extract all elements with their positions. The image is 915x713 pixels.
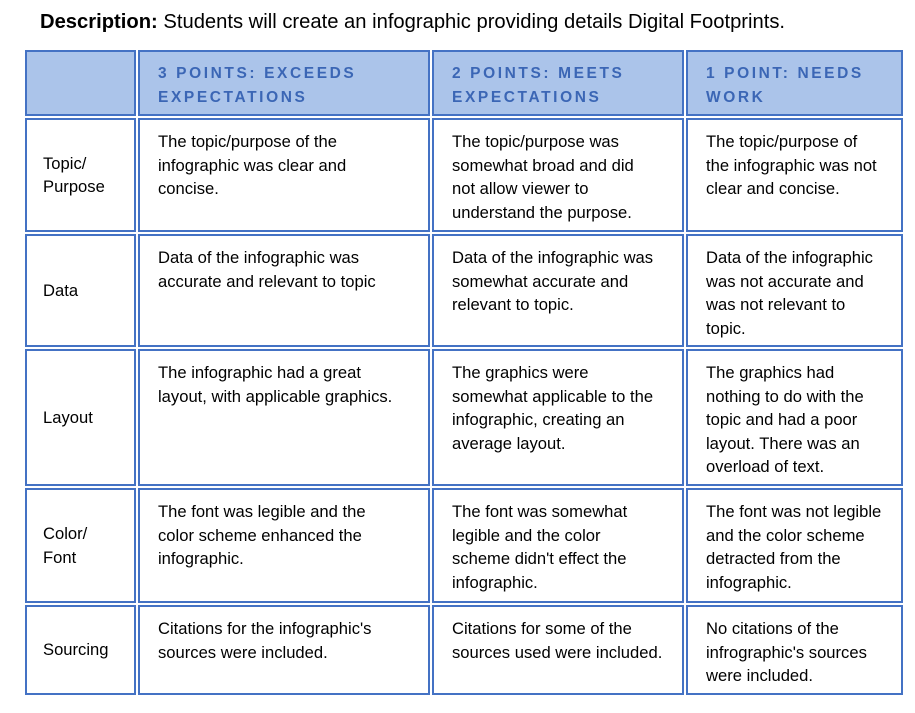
rubric table: topic and had a poor: [706, 410, 857, 429]
rubric table: The topic/purpose of the: [158, 132, 337, 151]
rubric table: concise.: [158, 179, 219, 198]
rubric table: detracted from the: [706, 549, 841, 568]
rubric table: EXPECTATIONS: [452, 88, 601, 106]
rubric table: relevant to topic.: [452, 295, 574, 314]
rubric table: The font was legible and the: [158, 502, 366, 521]
rubric table: The graphics were: [452, 363, 589, 382]
rubric table: color scheme enhanced the: [158, 526, 362, 544]
rubric table: Topic/: [43, 154, 86, 172]
rubric table: 2 POINTS: MEETS: [452, 65, 624, 82]
rubric table: nothing to do with the: [706, 386, 864, 406]
rubric table: overload of text.: [706, 457, 824, 476]
rubric table: sources used were included.: [452, 642, 662, 662]
rubric table: Data of the infographic was: [158, 248, 359, 267]
rubric table: Citations for some of the: [452, 619, 632, 638]
rubric table: layout, with applicable graphics.: [158, 386, 392, 406]
rubric table: The infographic had a great: [158, 363, 361, 382]
rubric table: accurate and relevant to topic: [158, 272, 376, 290]
rubric table: Color/: [43, 524, 87, 543]
rubric table: The graphics had: [706, 363, 834, 382]
rubric table: topic.: [706, 318, 746, 338]
rubric table: and the color scheme: [706, 526, 865, 544]
rubric table: Data of the infographic was: [452, 248, 653, 267]
rubric table: Layout: [43, 408, 93, 427]
rubric table: The topic/purpose was: [452, 132, 619, 151]
rubric table: layout. There was an: [706, 434, 860, 452]
rubric table: were included.: [706, 666, 813, 685]
rubric table: infographic.: [706, 572, 792, 592]
rubric table: scheme didn't effect the: [452, 549, 626, 568]
rubric table: somewhat broad and did: [452, 156, 634, 174]
rubric table: The font was somewhat: [452, 502, 627, 521]
rubric table: Citations for the infographic's: [158, 619, 371, 638]
row: topic/purpose: [25, 118, 903, 232]
row: color/font: [25, 488, 903, 603]
rubric table: 1 POINT: NEEDS: [706, 65, 864, 82]
rubric table: infrographic's sources: [706, 642, 867, 662]
rubric table: not allow viewer to: [452, 179, 589, 198]
rubric table: EXPECTATIONS: [158, 88, 307, 106]
rubric table: Data of the infographic: [706, 248, 873, 267]
rubric table: infographic was clear and: [158, 156, 346, 174]
rubric table: infographic.: [158, 549, 244, 568]
rubric table: 3 POINTS: EXCEEDS: [158, 65, 356, 82]
rubric table: the infographic was not: [706, 156, 877, 174]
title: Description: Students will create an infographic providing details Digital Footprints.: [40, 11, 785, 33]
row: sourcing: [25, 605, 903, 695]
rubric table: was not accurate and: [706, 272, 864, 290]
rubric table: clear and concise.: [706, 179, 840, 198]
rubric table: WORK: [706, 88, 765, 106]
rubric table: Sourcing: [43, 640, 108, 659]
rubric table: Purpose: [43, 177, 105, 196]
rubric table: somewhat applicable to the: [452, 386, 653, 406]
rubric table: average layout.: [452, 434, 565, 452]
rubric table: was not relevant to: [706, 295, 845, 314]
rubric table: somewhat accurate and: [452, 272, 628, 290]
rubric table: The topic/purpose of: [706, 132, 857, 151]
rubric table: legible and the color: [452, 526, 601, 544]
row: data: [25, 234, 903, 347]
rubric table: No citations of the: [706, 619, 839, 638]
rubric table: understand the purpose.: [452, 202, 632, 222]
rubric table: sources were included.: [158, 642, 328, 662]
rubric table: infographic, creating an: [452, 410, 625, 429]
rubric table: Font: [43, 548, 76, 566]
row: layout: [25, 349, 903, 486]
rubric table: infographic.: [452, 572, 538, 592]
header row: [25, 50, 903, 116]
rubric table: The font was not legible: [706, 502, 881, 521]
rubric table: Data: [43, 281, 78, 300]
